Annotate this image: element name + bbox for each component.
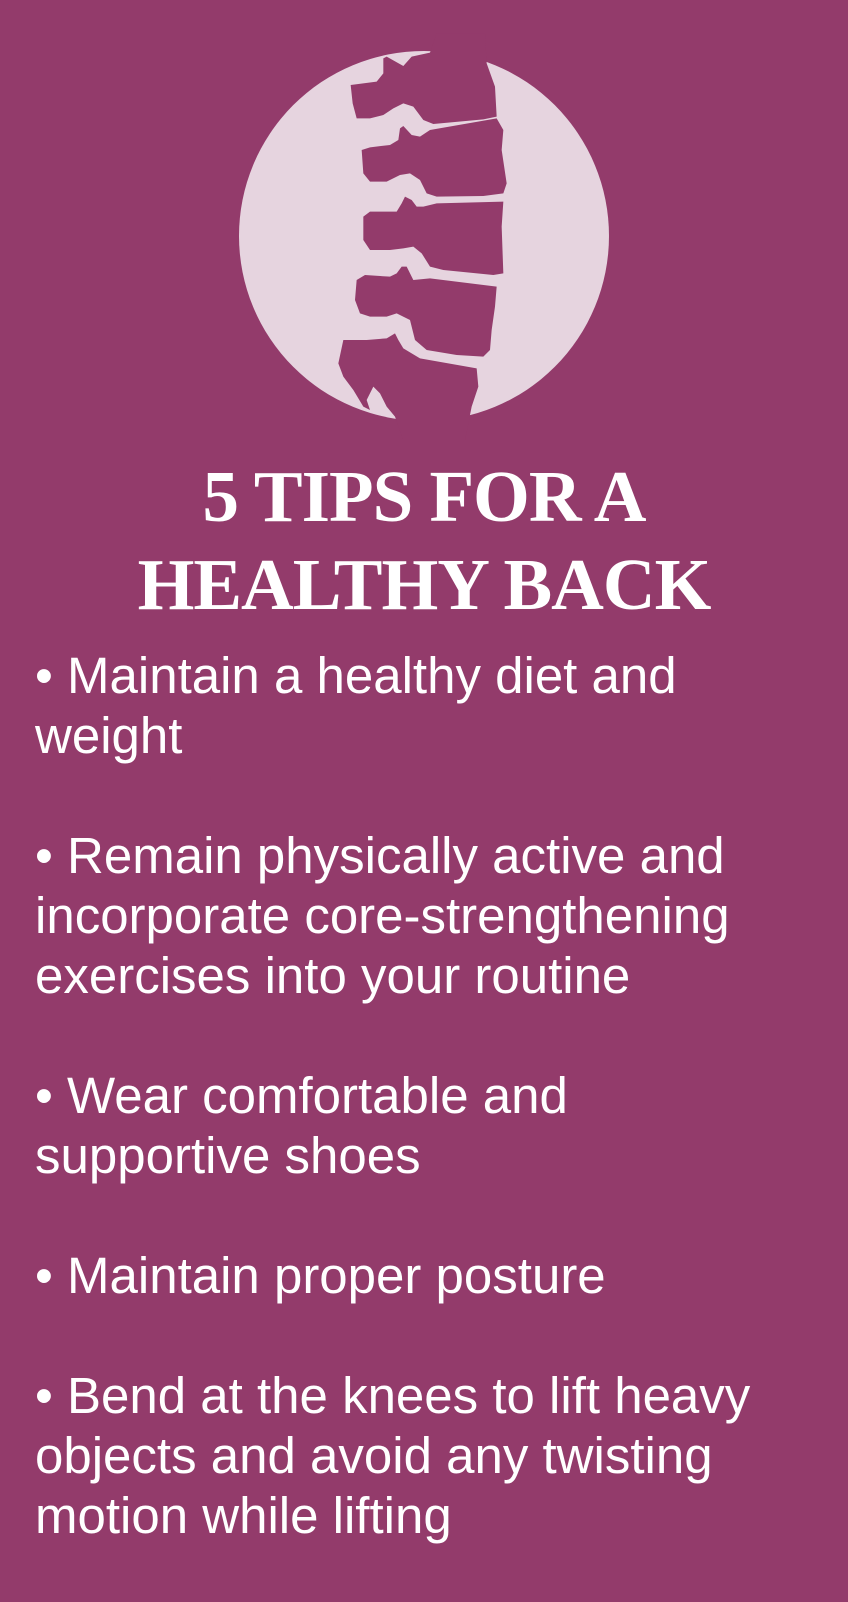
vertebra 2 <box>362 118 507 197</box>
vertebra 3 <box>363 197 503 275</box>
vertebra 1 <box>351 33 497 124</box>
tips list: • Maintain a healthy diet and weight • Remain physically active and incorporate core-strengthening exercises into your routine • Wear comfortable and supportive shoes • Maintain proper posture • Bend at the knees to lift heavy objects and avoid any twisting motion while lifting <box>35 647 750 1544</box>
title: 5 TIPS FOR A <box>202 456 646 537</box>
circle <box>239 51 609 421</box>
title: HEALTHY BACK <box>138 544 710 625</box>
vertebra 4 <box>355 267 497 357</box>
title <box>138 456 711 625</box>
icon: spine in circle <box>239 51 609 419</box>
vertebra 5 <box>338 333 478 440</box>
